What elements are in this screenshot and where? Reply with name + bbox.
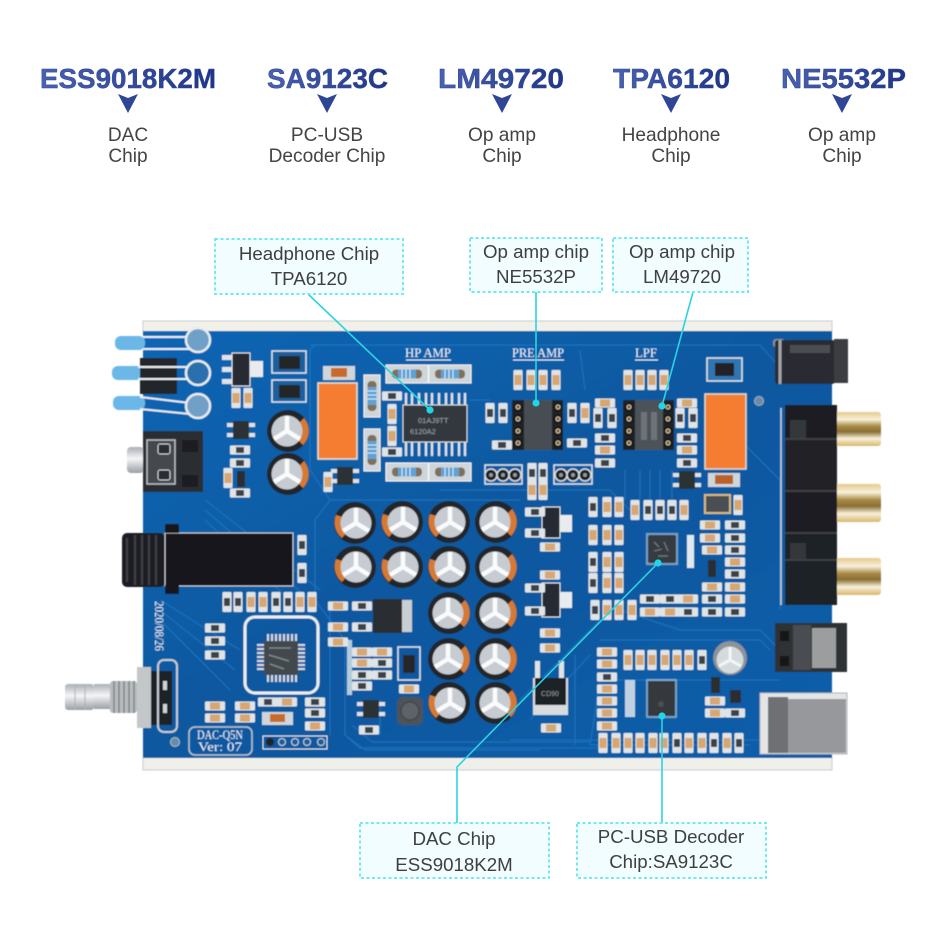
PCB traces [160,345,790,750]
aluminium rails [143,321,832,770]
callout: Op amp chip LM49720: Op amp chip [629,241,735,262]
USB-B connector [760,693,847,754]
blue PCB [143,331,832,758]
chip column: SA9123C: SA9123C [267,63,388,94]
chip heading row [40,63,906,167]
chip column: TPA6120: Chip [651,146,691,167]
DAC chip ESS9018K2M [646,533,678,565]
SMD array, centre right [588,497,745,620]
callout: PC-USB Decoder Chip SA9123C [577,712,766,878]
callout: Op amp chip NE5532P: Op amp chip [483,241,589,262]
chip column: NE5532P: Chip [822,146,862,167]
small parts around op amps [485,358,764,515]
resistors around headphone chip [364,365,471,481]
callout: DAC Chip ESS9018K2M [360,559,662,878]
version label DAC-Q5N: Ver: 07 [198,739,243,754]
USB decoder chip SA9123C [646,679,677,718]
chip column: NE5532P: Op amp [808,125,876,146]
orange block capacitors [318,383,746,469]
volume potentiometer [65,660,177,732]
op amp LM49720 in socket [623,400,674,450]
small parts, upper left [222,351,359,498]
chip column: TPA6120 [613,63,730,167]
chip column: SA9123C [267,63,388,167]
chip column: ESS9018K2M [40,63,216,167]
callout: PC-USB Decoder Chip SA9123C: Chip:SA9123C [609,851,733,872]
chip column: LM49720: LM49720 [438,63,564,94]
chip column: SA9123C: Decoder Chip [269,146,385,167]
circuit board photo illustration [65,321,881,770]
callout: PC-USB Decoder Chip SA9123C: PC-USB Decoder [598,826,744,847]
chip column: ESS9018K2M: ESS9018K2M [40,63,216,94]
callout: DAC Chip ESS9018K2M: DAC Chip [412,828,496,849]
callout: Op amp chip NE5532P: NE5532P [496,266,576,287]
microcontroller with white frame [245,617,318,693]
board silkscreen titles: PRE AMP [512,345,564,360]
headphone chip TPA6120: 01AJ9TT [418,416,449,425]
chip column: SA9123C: PC-USB [291,125,363,146]
blue LEDs [112,328,210,418]
optical connector, right [775,623,847,672]
board silkscreen titles [405,345,658,360]
chip column: LM49720 [438,63,564,167]
chip column: LM49720: Chip [482,146,522,167]
callout: Op amp chip LM49720 [613,238,748,410]
USB section SMD parts [597,648,745,753]
chip column: TPA6120: TPA6120 [613,63,730,94]
small electrolytic capacitor [713,641,747,675]
optical input, left [127,431,203,492]
headphone chip TPA6120: 6120A2 [410,427,436,436]
callout: Headphone Chip TPA6120: Headphone Chip [239,243,379,264]
chip column: ESS9018K2M: DAC [108,125,148,146]
chip column: LM49720: Op amp [468,125,536,146]
RCA outputs [781,405,881,605]
chip column: NE5532P: NE5532P [781,63,906,94]
callout: Op amp chip NE5532P [470,238,602,407]
capacitors, upper left [267,410,309,495]
board silkscreen titles: HP AMP [405,345,451,360]
version label DAC-Q5N [189,727,252,755]
headphone chip TPA6120 [403,393,467,456]
main capacitor bank [334,501,517,724]
callout: Headphone Chip TPA6120 [215,239,434,414]
regulators, centre: CD90 [541,691,559,698]
date silkscreen: 2020/08/26 [152,601,167,651]
op amp NE5532P in socket [512,400,563,450]
chip column: ESS9018K2M: Chip [108,146,148,167]
small parts, lower left [170,535,423,746]
callout: Op amp chip LM49720: LM49720 [643,266,721,287]
chip column: NE5532P [781,63,906,167]
version label DAC-Q5N: DAC-Q5N [197,727,243,742]
preamp SMD row [514,370,668,390]
regulators, centre [525,507,572,732]
callout: DAC Chip ESS9018K2M: ESS9018K2M [395,854,513,875]
quarter-inch headphone jack [122,524,293,594]
five-pin header [263,736,327,749]
callout: Headphone Chip TPA6120: TPA6120 [271,268,347,289]
DC power jack [773,339,848,384]
chip column: TPA6120: Headphone [622,125,720,146]
board silkscreen titles: LPF [635,345,657,360]
